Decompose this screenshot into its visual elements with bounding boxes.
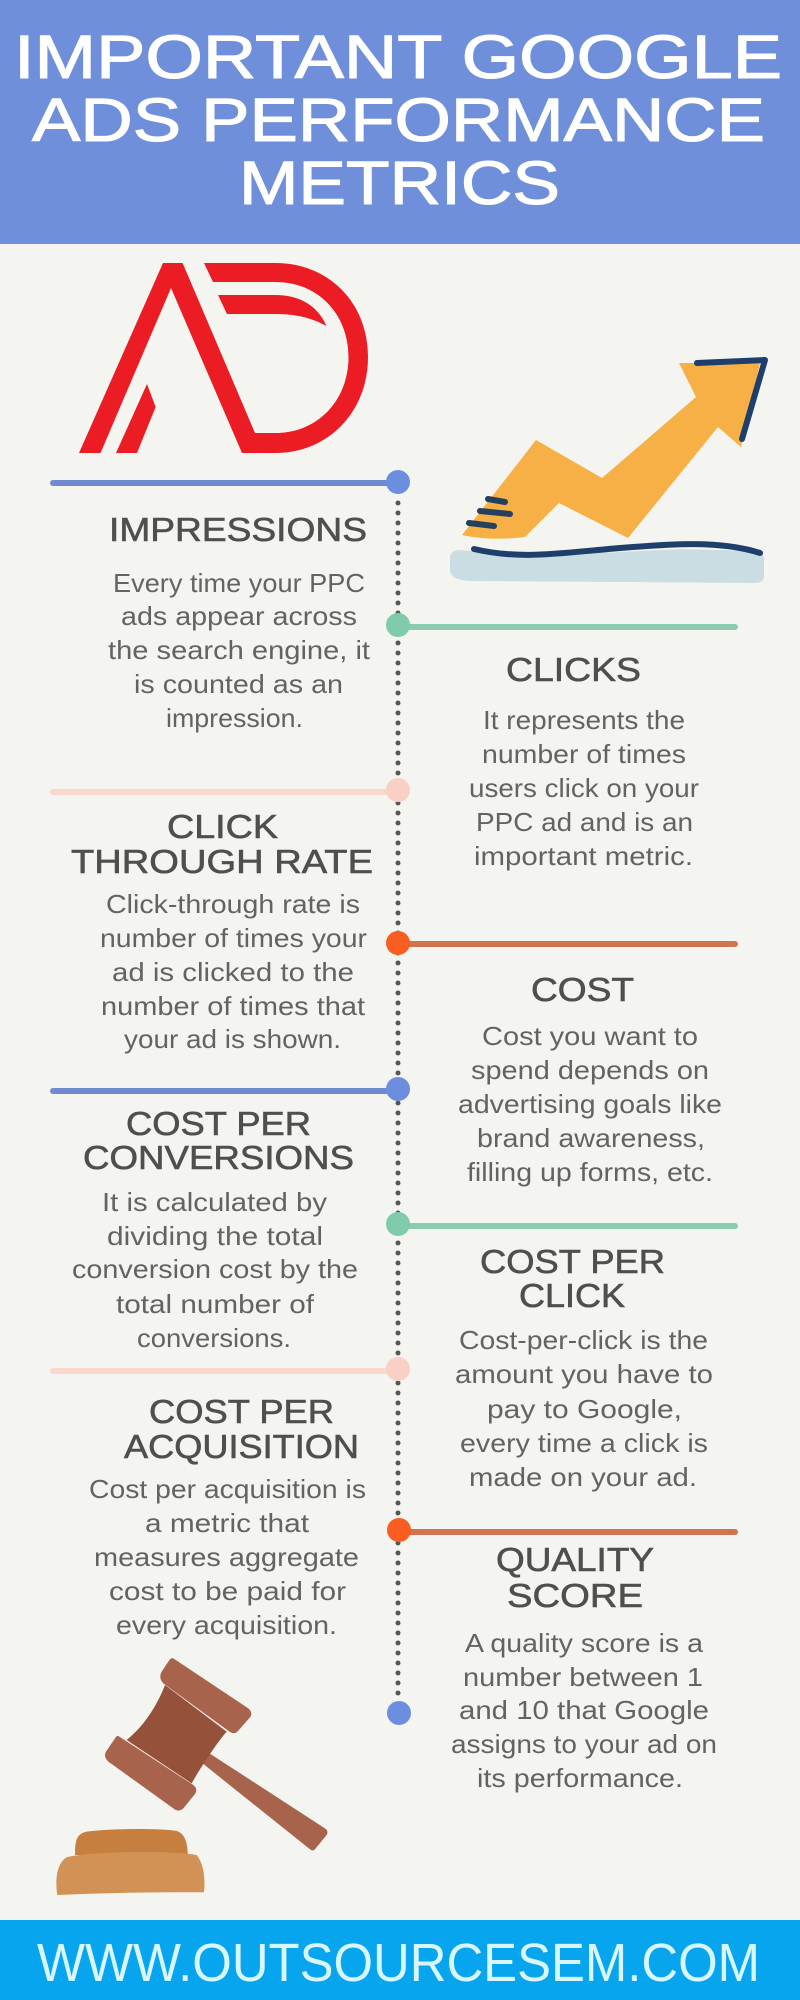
text: quality score description: number between 1 bbox=[463, 1662, 703, 1692]
text: cost per conversions description: It is calculated by bbox=[102, 1187, 327, 1217]
panel: click through rate bbox=[71, 808, 373, 1054]
timeline marker: impressions bbox=[50, 470, 410, 494]
title banner bbox=[0, 0, 800, 244]
text: cost per conversions description: dividing the total bbox=[107, 1221, 323, 1251]
text: cost per conversions description bbox=[72, 1187, 358, 1353]
text: cost description: advertising goals like bbox=[458, 1089, 722, 1119]
text: cost per acquisition description: a metric that bbox=[145, 1508, 310, 1538]
heading: cost per conversions: CONVERSIONS bbox=[83, 1139, 354, 1176]
icon: gavel bbox=[56, 1658, 327, 1895]
heading: quality score: QUALITY bbox=[496, 1541, 654, 1578]
title banner: IMPORTANT GOOGLE bbox=[14, 23, 782, 91]
text: impressions description: Every time your PPC bbox=[113, 568, 365, 598]
text: click through rate description bbox=[100, 889, 367, 1054]
panel: impressions bbox=[108, 511, 371, 733]
timeline dotted line bbox=[396, 503, 400, 1694]
text: click through rate description: your ad is shown. bbox=[124, 1024, 341, 1054]
timeline marker: click through rate bbox=[50, 778, 410, 802]
panel: cost bbox=[458, 971, 722, 1187]
title banner: ADS PERFORMANCE bbox=[32, 86, 765, 154]
panel: quality score bbox=[451, 1541, 717, 1793]
heading: impressions: IMPRESSIONS bbox=[109, 511, 367, 548]
icon: red AD logo bbox=[79, 263, 368, 453]
text: quality score description bbox=[451, 1628, 717, 1793]
text: click through rate description: number of times your bbox=[100, 923, 367, 953]
text: cost per acquisition description: measures aggregate bbox=[94, 1542, 359, 1572]
text: cost description bbox=[458, 1021, 722, 1187]
text: impressions description: ads appear across bbox=[121, 601, 357, 631]
heading: cost per acquisition: ACQUISITION bbox=[124, 1428, 359, 1465]
text: quality score description: A quality score is a bbox=[465, 1628, 704, 1658]
footer banner: WWW.OUTSOURCESEM.COM bbox=[37, 1933, 760, 1993]
heading: quality score: SCORE bbox=[507, 1577, 643, 1614]
heading: cost per click: CLICK bbox=[519, 1277, 625, 1314]
heading: cost per acquisition: COST PER bbox=[149, 1393, 334, 1430]
heading: cost per conversions bbox=[83, 1105, 354, 1176]
heading: click through rate bbox=[71, 808, 373, 880]
text: clicks description: users click on your bbox=[469, 773, 699, 803]
heading: cost per click bbox=[480, 1243, 665, 1314]
timeline marker: clicks bbox=[386, 613, 738, 637]
heading: quality score bbox=[496, 1541, 654, 1614]
timeline marker: cost per conversions bbox=[50, 1077, 410, 1101]
text: clicks description: important metric. bbox=[474, 841, 693, 871]
text: click through rate description: number of times that bbox=[101, 991, 366, 1021]
text: click through rate description: ad is clicked to the bbox=[112, 957, 354, 987]
text: cost per conversions description: conversion cost by the bbox=[72, 1254, 358, 1284]
heading: cost per acquisition bbox=[124, 1393, 359, 1465]
text: quality score description: its performance. bbox=[477, 1763, 683, 1793]
timeline marker: cost per acquisition bbox=[50, 1357, 410, 1381]
timeline marker: quality score bbox=[387, 1518, 738, 1542]
text: cost description: Cost you want to bbox=[482, 1021, 698, 1051]
text: clicks description bbox=[469, 705, 699, 871]
heading: click through rate: THROUGH RATE bbox=[71, 843, 373, 880]
heading: cost: COST bbox=[531, 971, 634, 1008]
text: quality score description: assigns to your ad on bbox=[451, 1729, 717, 1759]
text: cost per click description: Cost-per-click is the bbox=[459, 1325, 708, 1355]
text: impressions description: the search engine, it bbox=[108, 635, 371, 665]
text: cost per acquisition description: every acquisition. bbox=[116, 1610, 337, 1640]
text: click through rate description: Click-through rate is bbox=[106, 889, 360, 919]
title banner: METRICS bbox=[239, 149, 560, 217]
text: cost description: brand awareness, bbox=[477, 1123, 705, 1153]
icon: rising arrow bbox=[450, 360, 765, 583]
text: quality score description: and 10 that Google bbox=[459, 1695, 709, 1725]
text: cost per click description: made on your ad. bbox=[469, 1462, 697, 1492]
text: cost per acquisition description: cost to be paid for bbox=[109, 1576, 346, 1606]
text: cost per conversions description: conversions. bbox=[137, 1323, 291, 1353]
panel: cost per acquisition bbox=[89, 1393, 366, 1640]
text: impressions description: impression. bbox=[166, 703, 303, 733]
text: cost description: spend depends on bbox=[471, 1055, 709, 1085]
panel: cost per conversions bbox=[72, 1105, 358, 1353]
text: clicks description: PPC ad and is an bbox=[476, 807, 693, 837]
text: cost per click description: amount you have to bbox=[455, 1359, 713, 1389]
heading: clicks: CLICKS bbox=[506, 651, 641, 688]
timeline marker: cost per click bbox=[386, 1212, 738, 1236]
timeline marker: cost bbox=[386, 931, 738, 955]
panel: cost per click bbox=[455, 1243, 713, 1492]
timeline end dot bbox=[387, 1701, 411, 1725]
heading: cost per conversions: COST PER bbox=[126, 1105, 311, 1142]
panel: clicks bbox=[469, 651, 699, 871]
text: clicks description: number of times bbox=[482, 739, 686, 769]
text: clicks description: It represents the bbox=[483, 705, 685, 735]
heading: cost per click: COST PER bbox=[480, 1243, 665, 1280]
text: cost per click description: every time a click is bbox=[460, 1428, 708, 1458]
text: cost per conversions description: total number of bbox=[116, 1289, 315, 1319]
text: cost per acquisition description bbox=[89, 1474, 366, 1640]
text: cost per click description: pay to Google, bbox=[487, 1394, 682, 1424]
text: cost per click description bbox=[455, 1325, 713, 1492]
heading: click through rate: CLICK bbox=[167, 808, 278, 845]
text: cost description: filling up forms, etc. bbox=[467, 1157, 713, 1187]
text: cost per acquisition description: Cost per acquisition is bbox=[89, 1474, 366, 1504]
text: impressions description bbox=[108, 568, 371, 733]
text: impressions description: is counted as an bbox=[134, 669, 343, 699]
